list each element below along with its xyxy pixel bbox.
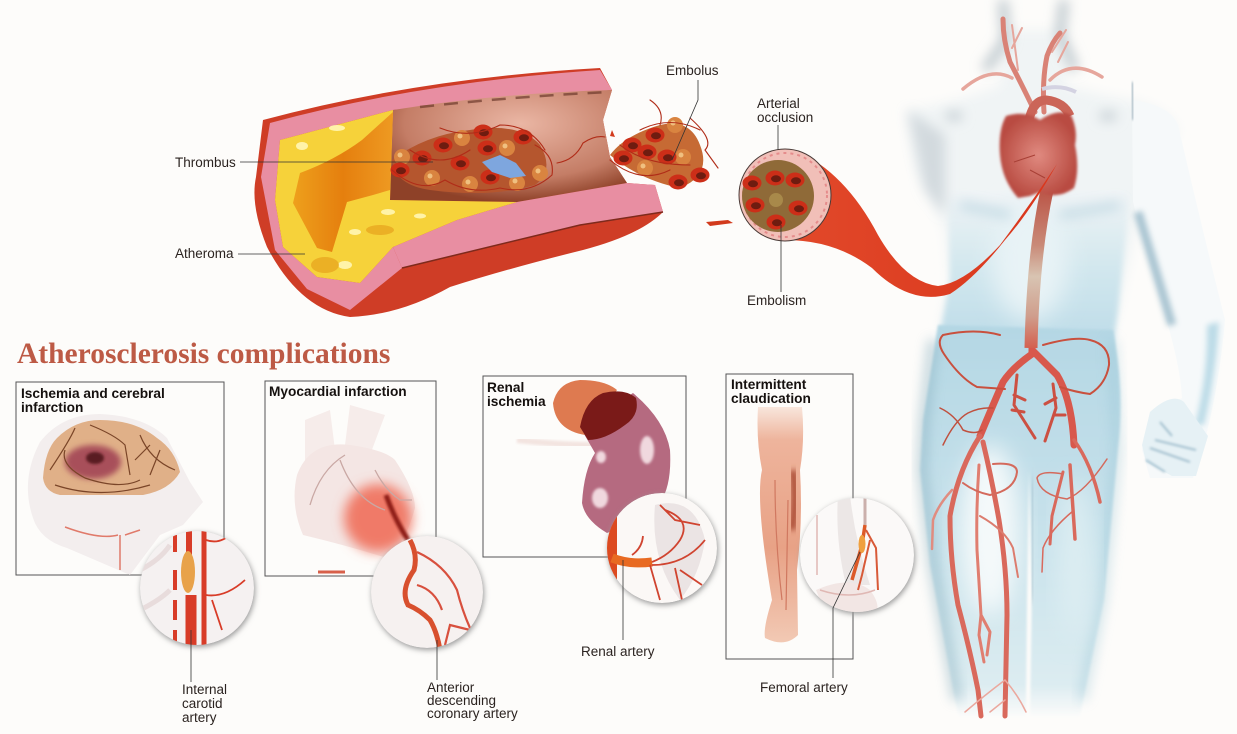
infarct xyxy=(65,445,121,479)
arm inner shading xyxy=(1138,212,1172,325)
label: Renal artery xyxy=(581,644,655,659)
clot xyxy=(742,160,814,232)
shin vein xyxy=(775,480,788,610)
shoulder crease xyxy=(1132,82,1133,120)
lumen circle xyxy=(739,149,831,241)
sulci xyxy=(50,425,175,492)
label: embolus: Embolus xyxy=(666,63,719,78)
inset xyxy=(800,495,914,620)
label: arterial occlusion: Arterial xyxy=(757,96,800,111)
inset shadow xyxy=(801,500,915,614)
fibrin strands xyxy=(392,125,605,190)
leg shading left xyxy=(922,340,957,700)
lower vessel xyxy=(318,570,345,574)
red cells xyxy=(390,124,532,184)
aorta xyxy=(1031,190,1047,348)
infarct core xyxy=(86,452,104,464)
label: thrombus: Thrombus xyxy=(175,155,236,170)
label: descending xyxy=(427,693,496,708)
heading: ischemia xyxy=(487,394,546,409)
arm xyxy=(1132,100,1225,478)
heading: Myocardial infarction xyxy=(269,384,407,399)
kidney xyxy=(580,393,670,533)
adrenal xyxy=(553,380,617,435)
pale band xyxy=(1042,87,1076,92)
inset shadow xyxy=(608,495,718,605)
coronaries xyxy=(310,455,412,510)
leg xyxy=(758,407,803,642)
inset shadow xyxy=(372,538,484,650)
pink wall xyxy=(261,70,612,310)
plaque highlights xyxy=(296,125,426,269)
label: artery xyxy=(182,710,217,725)
inset: internal carotid xyxy=(140,530,254,645)
abdomen highlight xyxy=(992,200,1068,320)
tail xyxy=(785,150,1057,297)
panel: ischemia xyxy=(16,382,255,725)
groin shading xyxy=(1032,480,1033,600)
leader xyxy=(833,552,860,678)
heading: infarction xyxy=(21,400,83,415)
label: arterial occlusion: occlusion xyxy=(757,110,813,125)
shoulders and chest xyxy=(905,30,1178,335)
leg shading right xyxy=(1082,340,1117,700)
forearm shading xyxy=(1195,322,1219,425)
plaque lumen xyxy=(293,112,393,252)
leader xyxy=(190,630,192,682)
plaque amber patches xyxy=(311,225,394,273)
label: carotid xyxy=(182,696,223,711)
yellow plaque xyxy=(275,110,517,283)
artery cross-section xyxy=(254,68,663,317)
inset shadow xyxy=(141,533,255,647)
back lumen wall xyxy=(390,90,627,202)
neck arteries xyxy=(963,19,1102,112)
heading: Intermittent xyxy=(731,377,806,392)
thigh highlight xyxy=(960,445,1020,615)
inset xyxy=(604,493,717,603)
orange cells xyxy=(394,130,548,192)
pale renal vein xyxy=(517,440,593,445)
leader xyxy=(436,640,438,680)
orange cells xyxy=(637,117,691,176)
thrombus xyxy=(390,124,605,193)
infarct cap xyxy=(580,391,637,440)
label: coronary artery xyxy=(427,706,518,721)
clot cells xyxy=(742,170,808,230)
kidney highlights xyxy=(592,436,654,508)
occluded artery xyxy=(739,149,1057,297)
strands xyxy=(610,100,718,176)
neck vessels xyxy=(65,527,140,570)
heading: Ischemia and cerebral xyxy=(21,386,165,401)
pale vessels xyxy=(510,407,518,470)
body figure xyxy=(905,0,1225,716)
label: Anterior xyxy=(427,680,474,695)
leader lines xyxy=(238,80,781,292)
neck shadow xyxy=(985,0,1075,70)
fingers xyxy=(1146,422,1196,472)
panel: renal xyxy=(483,376,718,659)
brain xyxy=(43,420,180,495)
leader xyxy=(622,560,624,640)
outer wall xyxy=(254,68,663,317)
label: embolism: Embolism xyxy=(747,293,806,308)
lumen dashes xyxy=(420,92,610,107)
heading: claudication xyxy=(731,391,811,406)
right thigh highlight xyxy=(1057,480,1093,640)
title: Atherosclerosis complications xyxy=(17,338,390,370)
abdomen xyxy=(938,190,1130,345)
top labels xyxy=(175,63,813,308)
wall rim xyxy=(743,153,827,237)
heart xyxy=(295,444,415,558)
embolus xyxy=(610,100,733,226)
panel: claudication xyxy=(726,374,915,695)
chest shadows xyxy=(908,110,1120,215)
heart xyxy=(1000,112,1077,198)
great vessels xyxy=(305,405,385,460)
lower wall xyxy=(393,183,663,268)
infarct core xyxy=(386,495,408,540)
label: atheroma: Atheroma xyxy=(175,246,234,261)
label: Internal xyxy=(182,682,227,697)
blue clot xyxy=(482,155,526,178)
inset xyxy=(371,536,483,650)
aortic arch xyxy=(1028,100,1070,125)
hand xyxy=(1142,399,1208,476)
panel: myocardial xyxy=(265,381,518,721)
skull xyxy=(28,414,203,575)
drops xyxy=(610,130,733,226)
calf shadow xyxy=(792,470,795,530)
label: Femoral artery xyxy=(760,680,848,695)
heading: Renal xyxy=(487,380,524,395)
infarct xyxy=(344,484,412,552)
coronary line xyxy=(1014,155,1045,178)
lower wall rim xyxy=(402,212,663,268)
legs xyxy=(920,325,1121,716)
leg arteries xyxy=(932,332,1109,716)
red cells xyxy=(614,128,710,190)
